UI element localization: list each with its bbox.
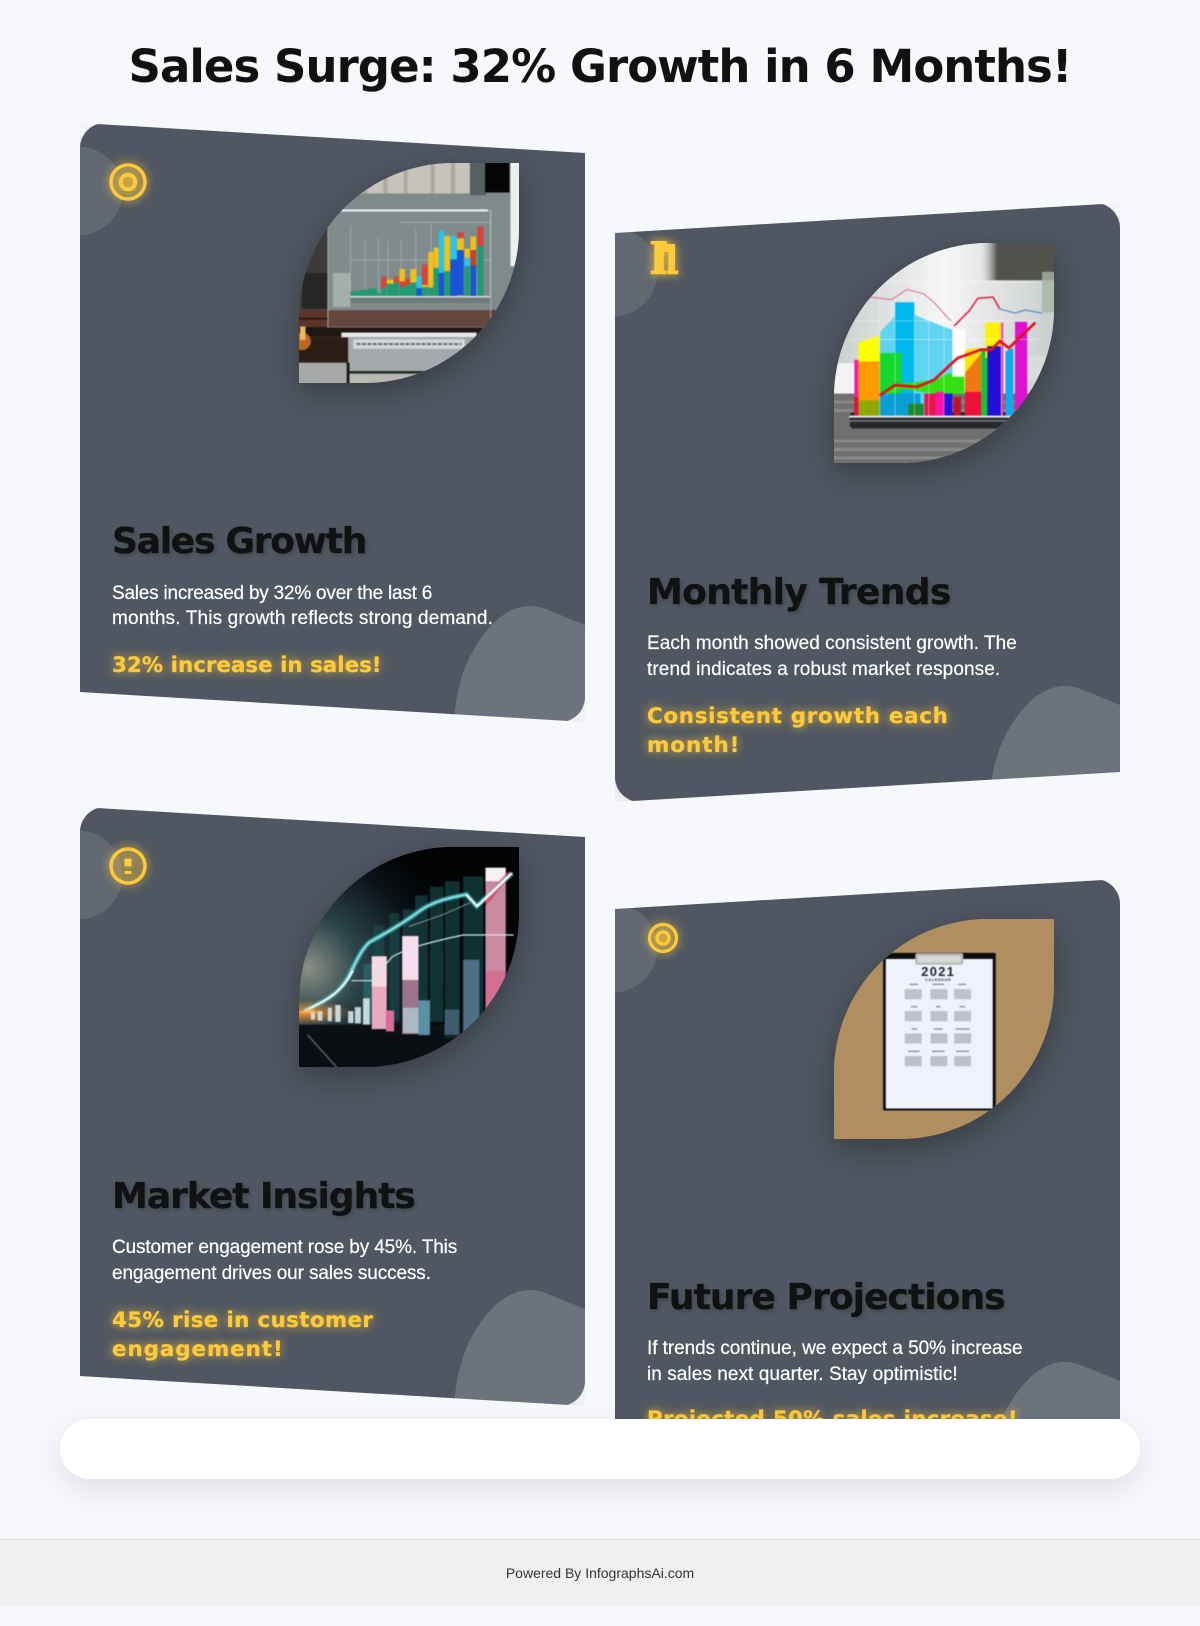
highlight: engagement! (112, 1337, 284, 1362)
card grid (80, 124, 1120, 1419)
image: 2021 calendar on clipboard: 2021 (921, 964, 955, 979)
description (112, 1238, 457, 1284)
panel: market insights (80, 807, 585, 1406)
description (647, 634, 1016, 680)
heading: Future Projections (647, 1277, 1005, 1318)
image: 2021 calendar on clipboard: CALENDAR (925, 977, 951, 981)
highlight: 45% rise in customer (112, 1308, 373, 1333)
description: trend indicates a robust market response. (647, 659, 1000, 680)
description (648, 1340, 1022, 1384)
panel: monthly trends (615, 203, 1120, 802)
heading: Sales Growth (112, 520, 366, 562)
highlight: month! (647, 732, 740, 758)
heading: Monthly Trends (647, 572, 951, 612)
description: months. This growth reflects strong demand. (112, 608, 493, 629)
footer: Powered By InfographsAi.com (506, 1565, 694, 1581)
panel: sales growth (80, 123, 585, 722)
highlight (642, 701, 952, 758)
decorative blobs (80, 146, 585, 721)
heading: Market Insights (112, 1176, 415, 1216)
description: Each month showed consistent growth. The (647, 633, 1017, 654)
icon: target (103, 156, 154, 208)
image: 2021 calendar on clipboard (834, 918, 1054, 1138)
decorative blobs (615, 908, 1120, 1419)
description (112, 584, 492, 628)
description: If trends continue, we expect a 50% increase (647, 1338, 1022, 1359)
description: Customer engagement rose by 45%. This (112, 1237, 457, 1258)
empty white bar (60, 1419, 1140, 1479)
panel: future projections (615, 879, 1120, 1478)
image: colourful chart on tablet (834, 242, 1054, 462)
footer (0, 1539, 1200, 1606)
highlight: 32% increase in sales! (112, 653, 382, 678)
description: Sales increased by 32% over the last 6 (112, 582, 432, 604)
highlight: Consistent growth each (647, 704, 949, 728)
description: in sales next quarter. Stay optimistic! (647, 1364, 958, 1385)
icon: small target (642, 916, 684, 960)
description: engagement drives our sales success. (112, 1263, 431, 1284)
image: glass monitor chart (299, 162, 519, 382)
icon: h glyph (646, 234, 684, 282)
decorative blobs (615, 232, 1120, 780)
highlight (107, 1305, 377, 1366)
title: Sales Surge: 32% Growth in 6 Months! (129, 40, 1071, 93)
image: neon growth chart (299, 846, 519, 1066)
icon: alert circle (103, 840, 154, 892)
decorative blobs (80, 830, 585, 1405)
